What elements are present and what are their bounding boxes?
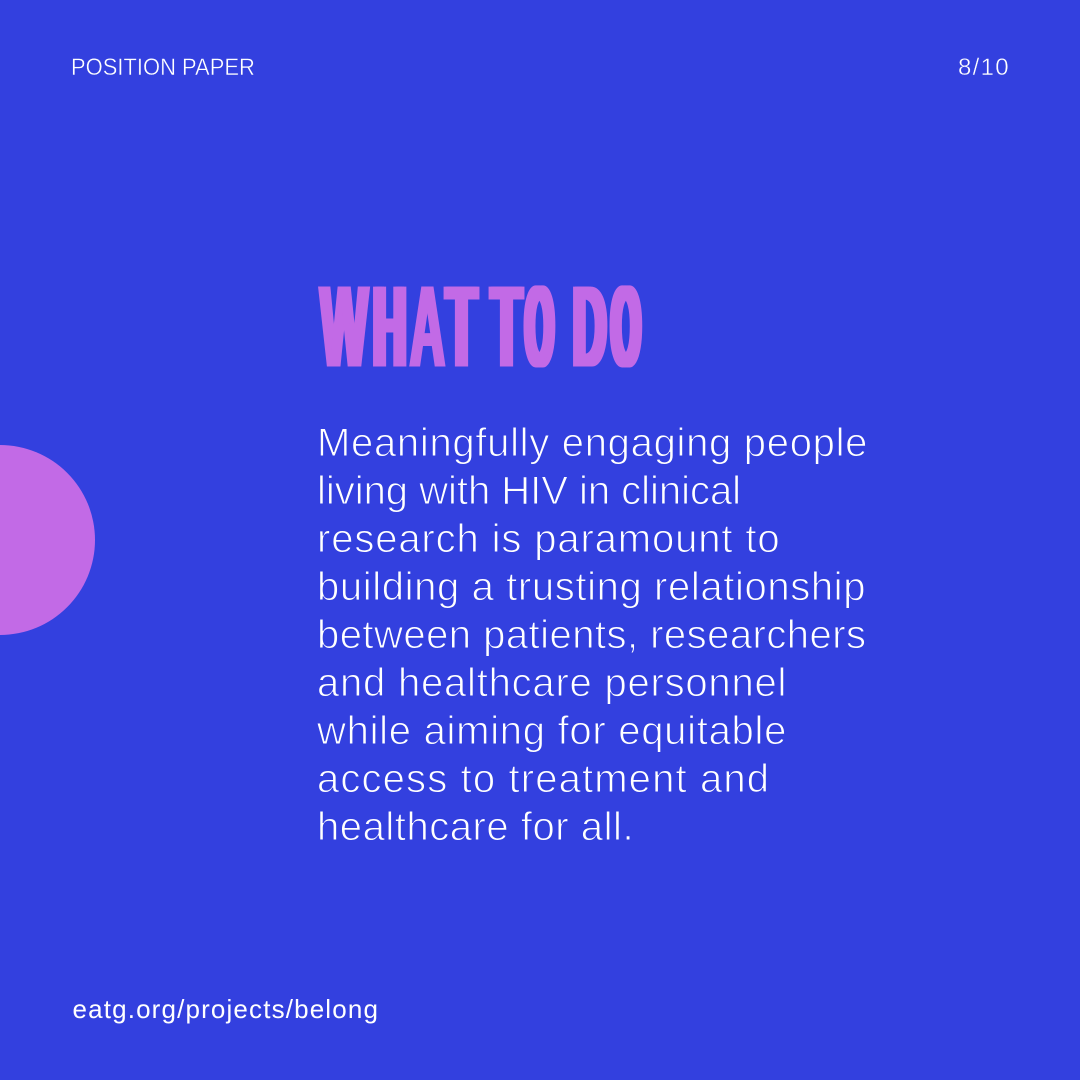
body text: while aiming for equitable [317,709,787,753]
title: H [370,262,403,392]
body text: research is paramount to [317,517,780,561]
body text: between patients, researchers [317,613,866,657]
title [318,262,642,392]
title: O [522,262,551,392]
title: D [570,262,603,392]
body text: and healthcare personnel [317,661,787,705]
body text: Meaningfully engaging people [317,421,868,465]
title: O [608,262,637,392]
decorative circle [0,445,95,635]
title: T [488,262,519,392]
body text: healthcare for all. [317,805,634,849]
title: W [318,262,365,392]
body text: living with HIV in clinical [317,469,741,513]
footer url: eatg.org/projects/belong [72,994,379,1024]
body text [317,421,868,849]
body text: access to treatment and [317,757,770,801]
header label: POSITION PAPER [71,54,255,81]
page number: 8/10 [958,54,1010,81]
title: T [443,262,474,392]
title: A [408,262,443,392]
body text: building a trusting relationship [317,565,866,609]
